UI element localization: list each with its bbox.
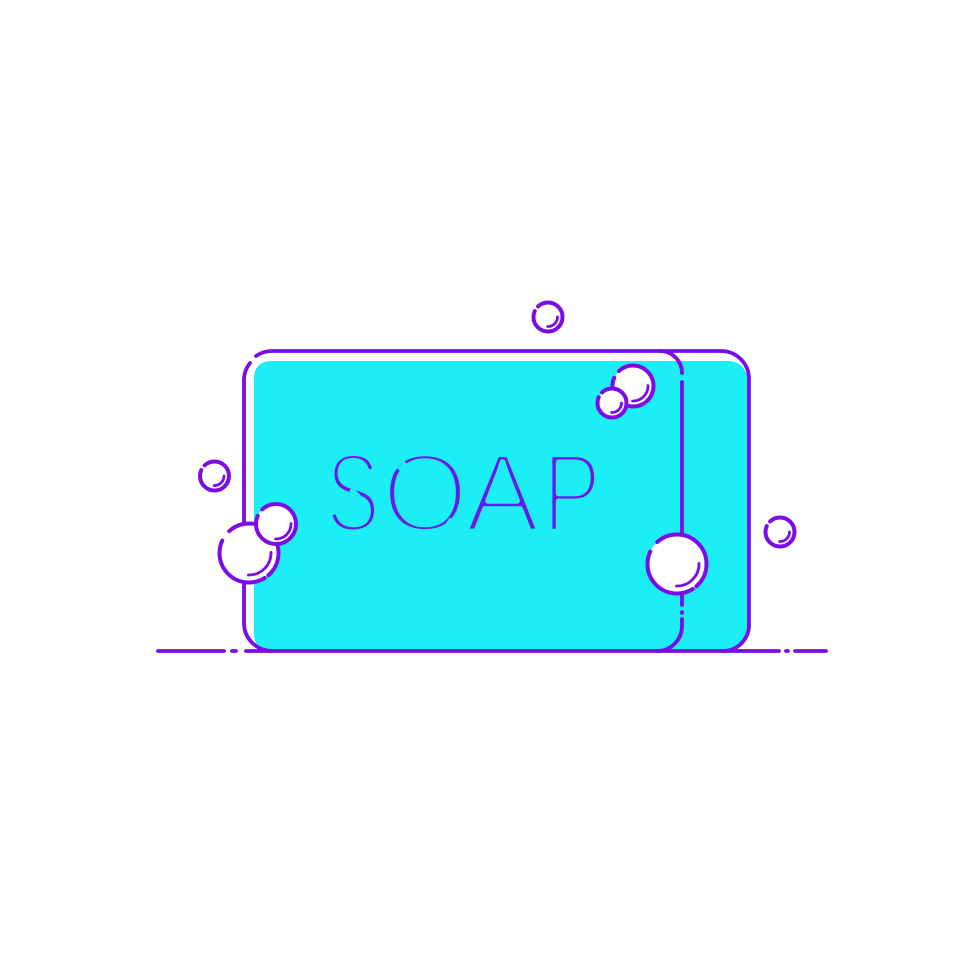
ground line bbox=[158, 649, 826, 653]
bubble: top right large bbox=[612, 366, 654, 406]
bubble: top right small bbox=[598, 388, 626, 418]
bubble: top bbox=[534, 302, 562, 332]
SOAP label: O bbox=[381, 430, 469, 556]
soap body fill bbox=[254, 361, 749, 651]
SOAP label: A bbox=[465, 430, 540, 556]
SOAP label: P bbox=[543, 431, 601, 556]
soap outline: back edge bbox=[660, 351, 749, 651]
bubble: right large bbox=[648, 534, 706, 594]
SOAP label bbox=[326, 430, 601, 556]
bubble: far left bbox=[200, 462, 229, 490]
bubble: left large bbox=[220, 524, 278, 582]
bubble: far right bbox=[766, 518, 794, 546]
bubble: left small bbox=[256, 504, 296, 544]
SOAP label: S bbox=[326, 431, 380, 556]
soap outline: front face bbox=[244, 351, 682, 651]
